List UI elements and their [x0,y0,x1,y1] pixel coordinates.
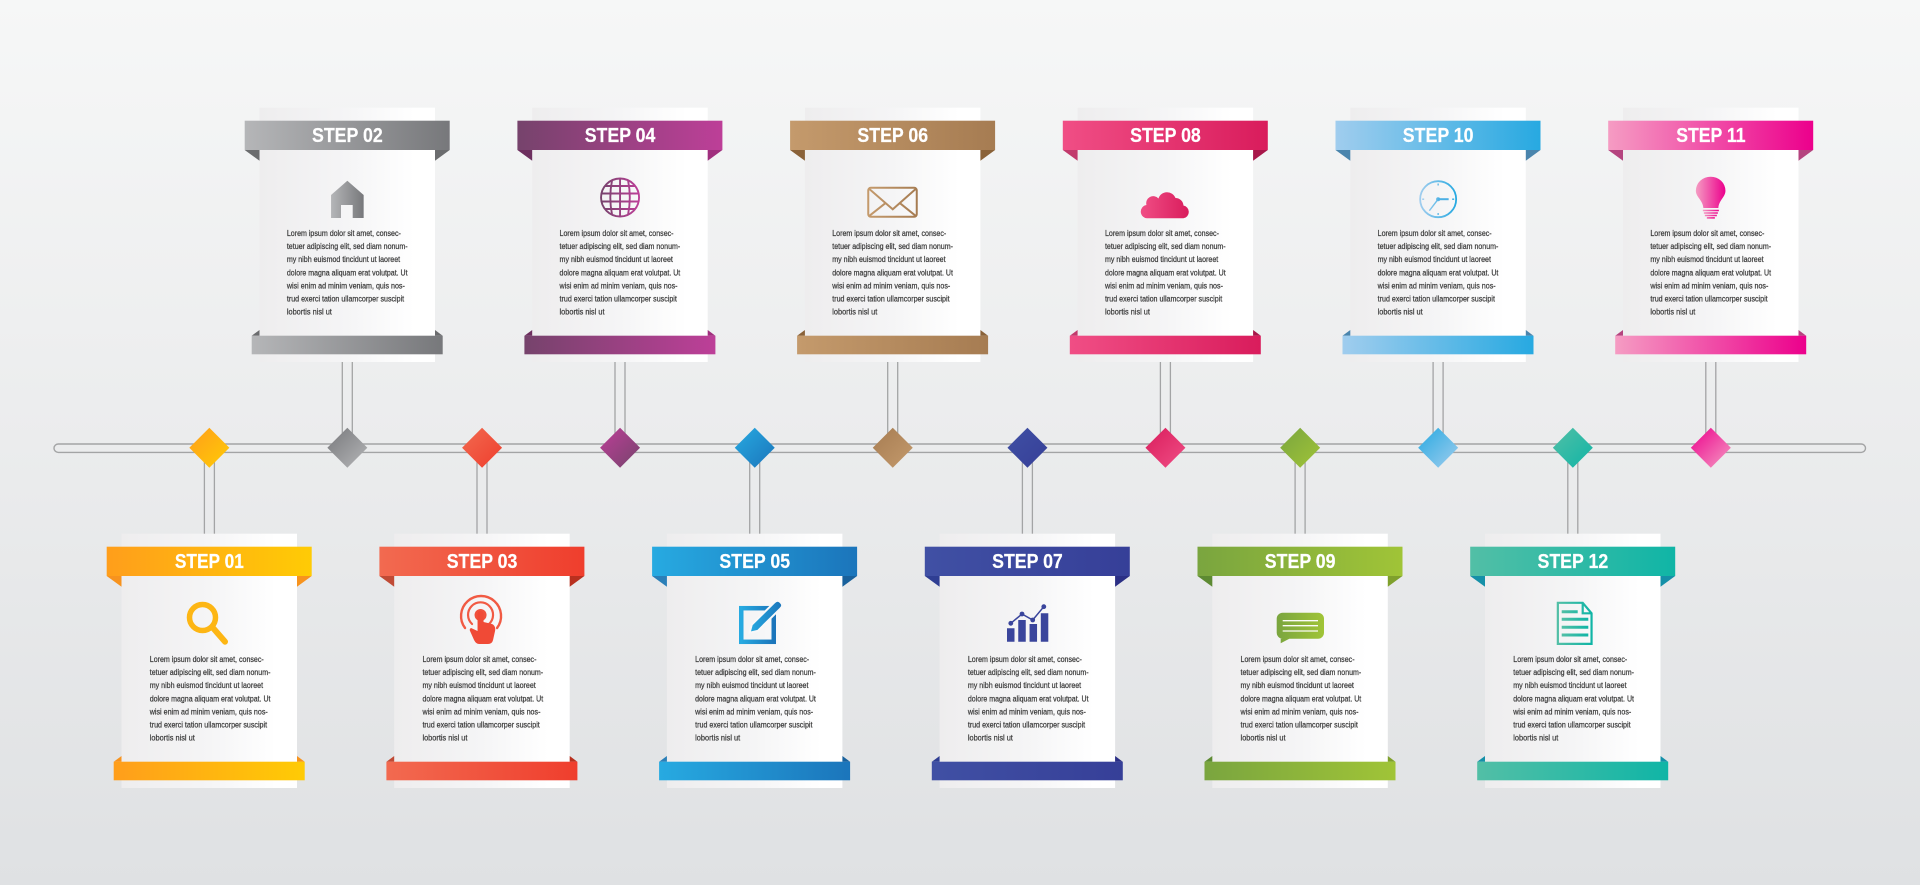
top ribbon [1470,547,1675,587]
text block: tetuer adipiscing elit, sed diam nonum- [560,241,680,251]
bottom ribbon [797,330,988,354]
text block: Lorem ipsum dolor sit amet, consec- [968,654,1082,664]
panel: step 08 [1063,108,1268,362]
text block: tetuer adipiscing elit, sed diam nonum- [832,241,953,251]
text block: trud exerci tation ullamcorper suscipit [832,294,950,304]
text block: my nibh euismod tincidunt ut laoreet [422,680,536,690]
top ribbon [379,547,584,587]
text block: Lorem ipsum dolor sit amet, consec- [1378,228,1492,238]
text block: Lorem ipsum dolor sit amet, consec- [560,228,674,238]
text block: lobortis nisl ut [1650,307,1696,317]
bottom ribbon [386,756,577,780]
text block: tetuer adipiscing elit, sed diam nonum- [1378,241,1499,251]
text block: wisi enim ad minim veniam, quis nos- [1104,280,1223,290]
card sheet [1350,108,1526,362]
top ribbon [652,547,857,587]
card sheet [532,108,708,362]
text block: tetuer adipiscing elit, sed diam nonum- [1650,241,1771,251]
bottom ribbon [524,330,715,354]
text block [559,228,681,317]
heading: STEP 01 [175,550,244,573]
text block: wisi enim ad minim veniam, quis nos- [1240,706,1359,716]
icon: clock [1420,181,1456,217]
text block: trud exerci tation ullamcorper suscipit [560,294,677,304]
diamond markers [189,428,1731,468]
top ribbon [1608,121,1813,161]
icon: magnifier [190,604,225,642]
heading: STEP 06 [857,124,928,147]
text block: lobortis nisl ut [1241,733,1286,743]
text block: lobortis nisl ut [1378,307,1423,317]
text block [422,654,544,743]
text block [694,654,816,743]
card sheet [1623,108,1798,362]
panel: step 05 [652,534,857,788]
icon: document [1558,603,1592,644]
heading: STEP 11 [1676,124,1745,147]
text block: lobortis nisl ut [1105,307,1151,317]
panel: step 04 [517,108,722,362]
text block: dolore magna aliquam erat volutpat. Ut [287,267,408,277]
text block: dolore magna aliquam erat volutpat. Ut [832,267,954,277]
text block: dolore magna aliquam erat volutpat. Ut [1241,693,1362,703]
text block: wisi enim ad minim veniam, quis nos- [1512,706,1631,716]
icon: touch target [461,596,501,644]
icon: edit [741,601,782,642]
bottom ribbon [1342,330,1534,354]
text block: trud exerci tation ullamcorper suscipit [1513,720,1631,730]
card sheet [394,534,570,788]
panel: step 10 [1336,108,1540,362]
panel: step 06 [790,108,995,362]
text block: tetuer adipiscing elit, sed diam nonum- [422,667,543,677]
heading: STEP 09 [1265,550,1336,573]
text block: Lorem ipsum dolor sit amet, consec- [422,654,537,664]
text block: tetuer adipiscing elit, sed diam nonum- [1513,667,1634,677]
card sheet [122,534,297,788]
top ribbon [1063,121,1268,161]
bottom ribbon [1615,330,1806,354]
text block [967,654,1089,743]
heading: STEP 10 [1403,124,1474,147]
top ribbon [1336,121,1540,161]
text block: dolore magna aliquam erat volutpat. Ut [422,693,544,703]
text block: my nibh euismod tincidunt ut laoreet [150,680,264,690]
text block: my nibh euismod tincidunt ut laoreet [695,680,809,690]
text block: trud exerci tation ullamcorper suscipit [695,720,813,730]
top ribbon [1198,547,1402,587]
text block: dolore magna aliquam erat volutpat. Ut [1105,267,1226,277]
panel: step 12 [1470,534,1675,788]
bottom ribbon [252,330,443,354]
text block: wisi enim ad minim veniam, quis nos- [422,706,541,716]
connectors [204,362,1716,534]
top ribbon [245,121,450,161]
panel: step 11 [1608,108,1813,362]
panel: step 02 [245,108,450,362]
text block: Lorem ipsum dolor sit amet, consec- [287,228,401,238]
text block: wisi enim ad minim veniam, quis nos- [149,706,268,716]
text block: trud exerci tation ullamcorper suscipit [1241,720,1358,730]
text block: trud exerci tation ullamcorper suscipit [1105,294,1223,304]
text block: Lorem ipsum dolor sit amet, consec- [1650,228,1765,238]
bottom ribbon [114,756,305,780]
text block [1377,228,1499,317]
bottom ribbon [659,756,850,780]
card sheet [667,534,842,788]
text block: lobortis nisl ut [695,733,741,743]
top ribbon [107,547,312,587]
text block: Lorem ipsum dolor sit amet, consec- [1241,654,1355,664]
heading: STEP 05 [719,550,790,573]
icon: cloud [1141,192,1189,218]
text block: lobortis nisl ut [287,307,332,317]
text block: my nibh euismod tincidunt ut laoreet [1513,680,1627,690]
bottom ribbon [1204,756,1396,780]
text block: lobortis nisl ut [150,733,195,743]
text block: tetuer adipiscing elit, sed diam nonum- [1105,241,1226,251]
text block: dolore magna aliquam erat volutpat. Ut [1378,267,1499,277]
text block: wisi enim ad minim veniam, quis nos- [694,706,813,716]
card sheet [1078,108,1253,362]
icon: growth chart [1007,604,1048,642]
text block: Lorem ipsum dolor sit amet, consec- [150,654,264,664]
text block: lobortis nisl ut [968,733,1013,743]
text block: dolore magna aliquam erat volutpat. Ut [560,267,681,277]
text block [149,654,271,743]
text block [1240,654,1362,743]
text block: dolore magna aliquam erat volutpat. Ut [968,693,1089,703]
text block: Lorem ipsum dolor sit amet, consec- [695,654,809,664]
heading: STEP 04 [585,124,656,147]
text block: lobortis nisl ut [832,307,878,317]
text block: wisi enim ad minim veniam, quis nos- [286,280,405,290]
text block [1104,228,1226,317]
text block: my nibh euismod tincidunt ut laoreet [1650,254,1764,264]
card sheet [1485,534,1660,788]
text block: my nibh euismod tincidunt ut laoreet [1105,254,1219,264]
text block: Lorem ipsum dolor sit amet, consec- [832,228,946,238]
top ribbon [925,547,1130,587]
text block: my nibh euismod tincidunt ut laoreet [560,254,673,264]
text block: dolore magna aliquam erat volutpat. Ut [1513,693,1635,703]
text block: dolore magna aliquam erat volutpat. Ut [695,693,816,703]
text block: lobortis nisl ut [422,733,468,743]
icon: globe [601,178,639,216]
bottom ribbon [932,756,1123,780]
text block: trud exerci tation ullamcorper suscipit [1650,294,1768,304]
icon: chat bubble [1277,613,1324,643]
text block: tetuer adipiscing elit, sed diam nonum- [287,241,408,251]
text block: Lorem ipsum dolor sit amet, consec- [1105,228,1219,238]
text block: my nibh euismod tincidunt ut laoreet [1241,680,1354,690]
icon: light bulb [1696,177,1725,219]
text block: tetuer adipiscing elit, sed diam nonum- [695,667,816,677]
top ribbon [517,121,722,161]
heading: STEP 08 [1130,124,1201,147]
text block: wisi enim ad minim veniam, quis nos- [831,280,950,290]
text block: my nibh euismod tincidunt ut laoreet [832,254,946,264]
heading: STEP 07 [992,550,1063,573]
text block: tetuer adipiscing elit, sed diam nonum- [150,667,271,677]
panel: step 07 [925,534,1130,788]
card sheet [805,108,980,362]
text block: trud exerci tation ullamcorper suscipit [422,720,540,730]
text block: trud exerci tation ullamcorper suscipit [287,294,405,304]
timeline [54,362,1866,534]
text block: lobortis nisl ut [560,307,605,317]
text block: my nibh euismod tincidunt ut laoreet [968,680,1082,690]
text block: my nibh euismod tincidunt ut laoreet [1378,254,1492,264]
panel: step 01 [107,534,312,788]
timeline bar [54,444,1866,452]
heading: STEP 12 [1537,550,1608,573]
card sheet [940,534,1115,788]
text block: lobortis nisl ut [1513,733,1559,743]
text block: wisi enim ad minim veniam, quis nos- [1377,280,1496,290]
text block: tetuer adipiscing elit, sed diam nonum- [1241,667,1361,677]
text block: wisi enim ad minim veniam, quis nos- [967,706,1086,716]
icon: house [331,181,364,218]
text block: trud exerci tation ullamcorper suscipit [150,720,268,730]
text block [286,228,408,317]
text block: trud exerci tation ullamcorper suscipit [968,720,1086,730]
text block: wisi enim ad minim veniam, quis nos- [1649,280,1769,290]
bottom ribbon [1477,756,1668,780]
panel: step 03 [379,534,584,788]
text block: wisi enim ad minim veniam, quis nos- [559,280,678,290]
top ribbon [790,121,995,161]
text block: tetuer adipiscing elit, sed diam nonum- [968,667,1089,677]
text block: Lorem ipsum dolor sit amet, consec- [1513,654,1627,664]
text block: dolore magna aliquam erat volutpat. Ut [150,693,271,703]
heading: STEP 03 [447,550,517,573]
text block: trud exerci tation ullamcorper suscipit [1378,294,1496,304]
text block: my nibh euismod tincidunt ut laoreet [287,254,401,264]
text block [831,228,954,317]
card sheet [260,108,435,362]
text block [1649,228,1772,317]
panel: step 09 [1198,534,1402,788]
heading: STEP 02 [312,124,383,147]
icon: envelope [868,188,917,217]
card sheet [1212,534,1388,788]
bottom ribbon [1070,330,1261,354]
text block: dolore magna aliquam erat volutpat. Ut [1650,267,1772,277]
text block [1512,654,1635,743]
